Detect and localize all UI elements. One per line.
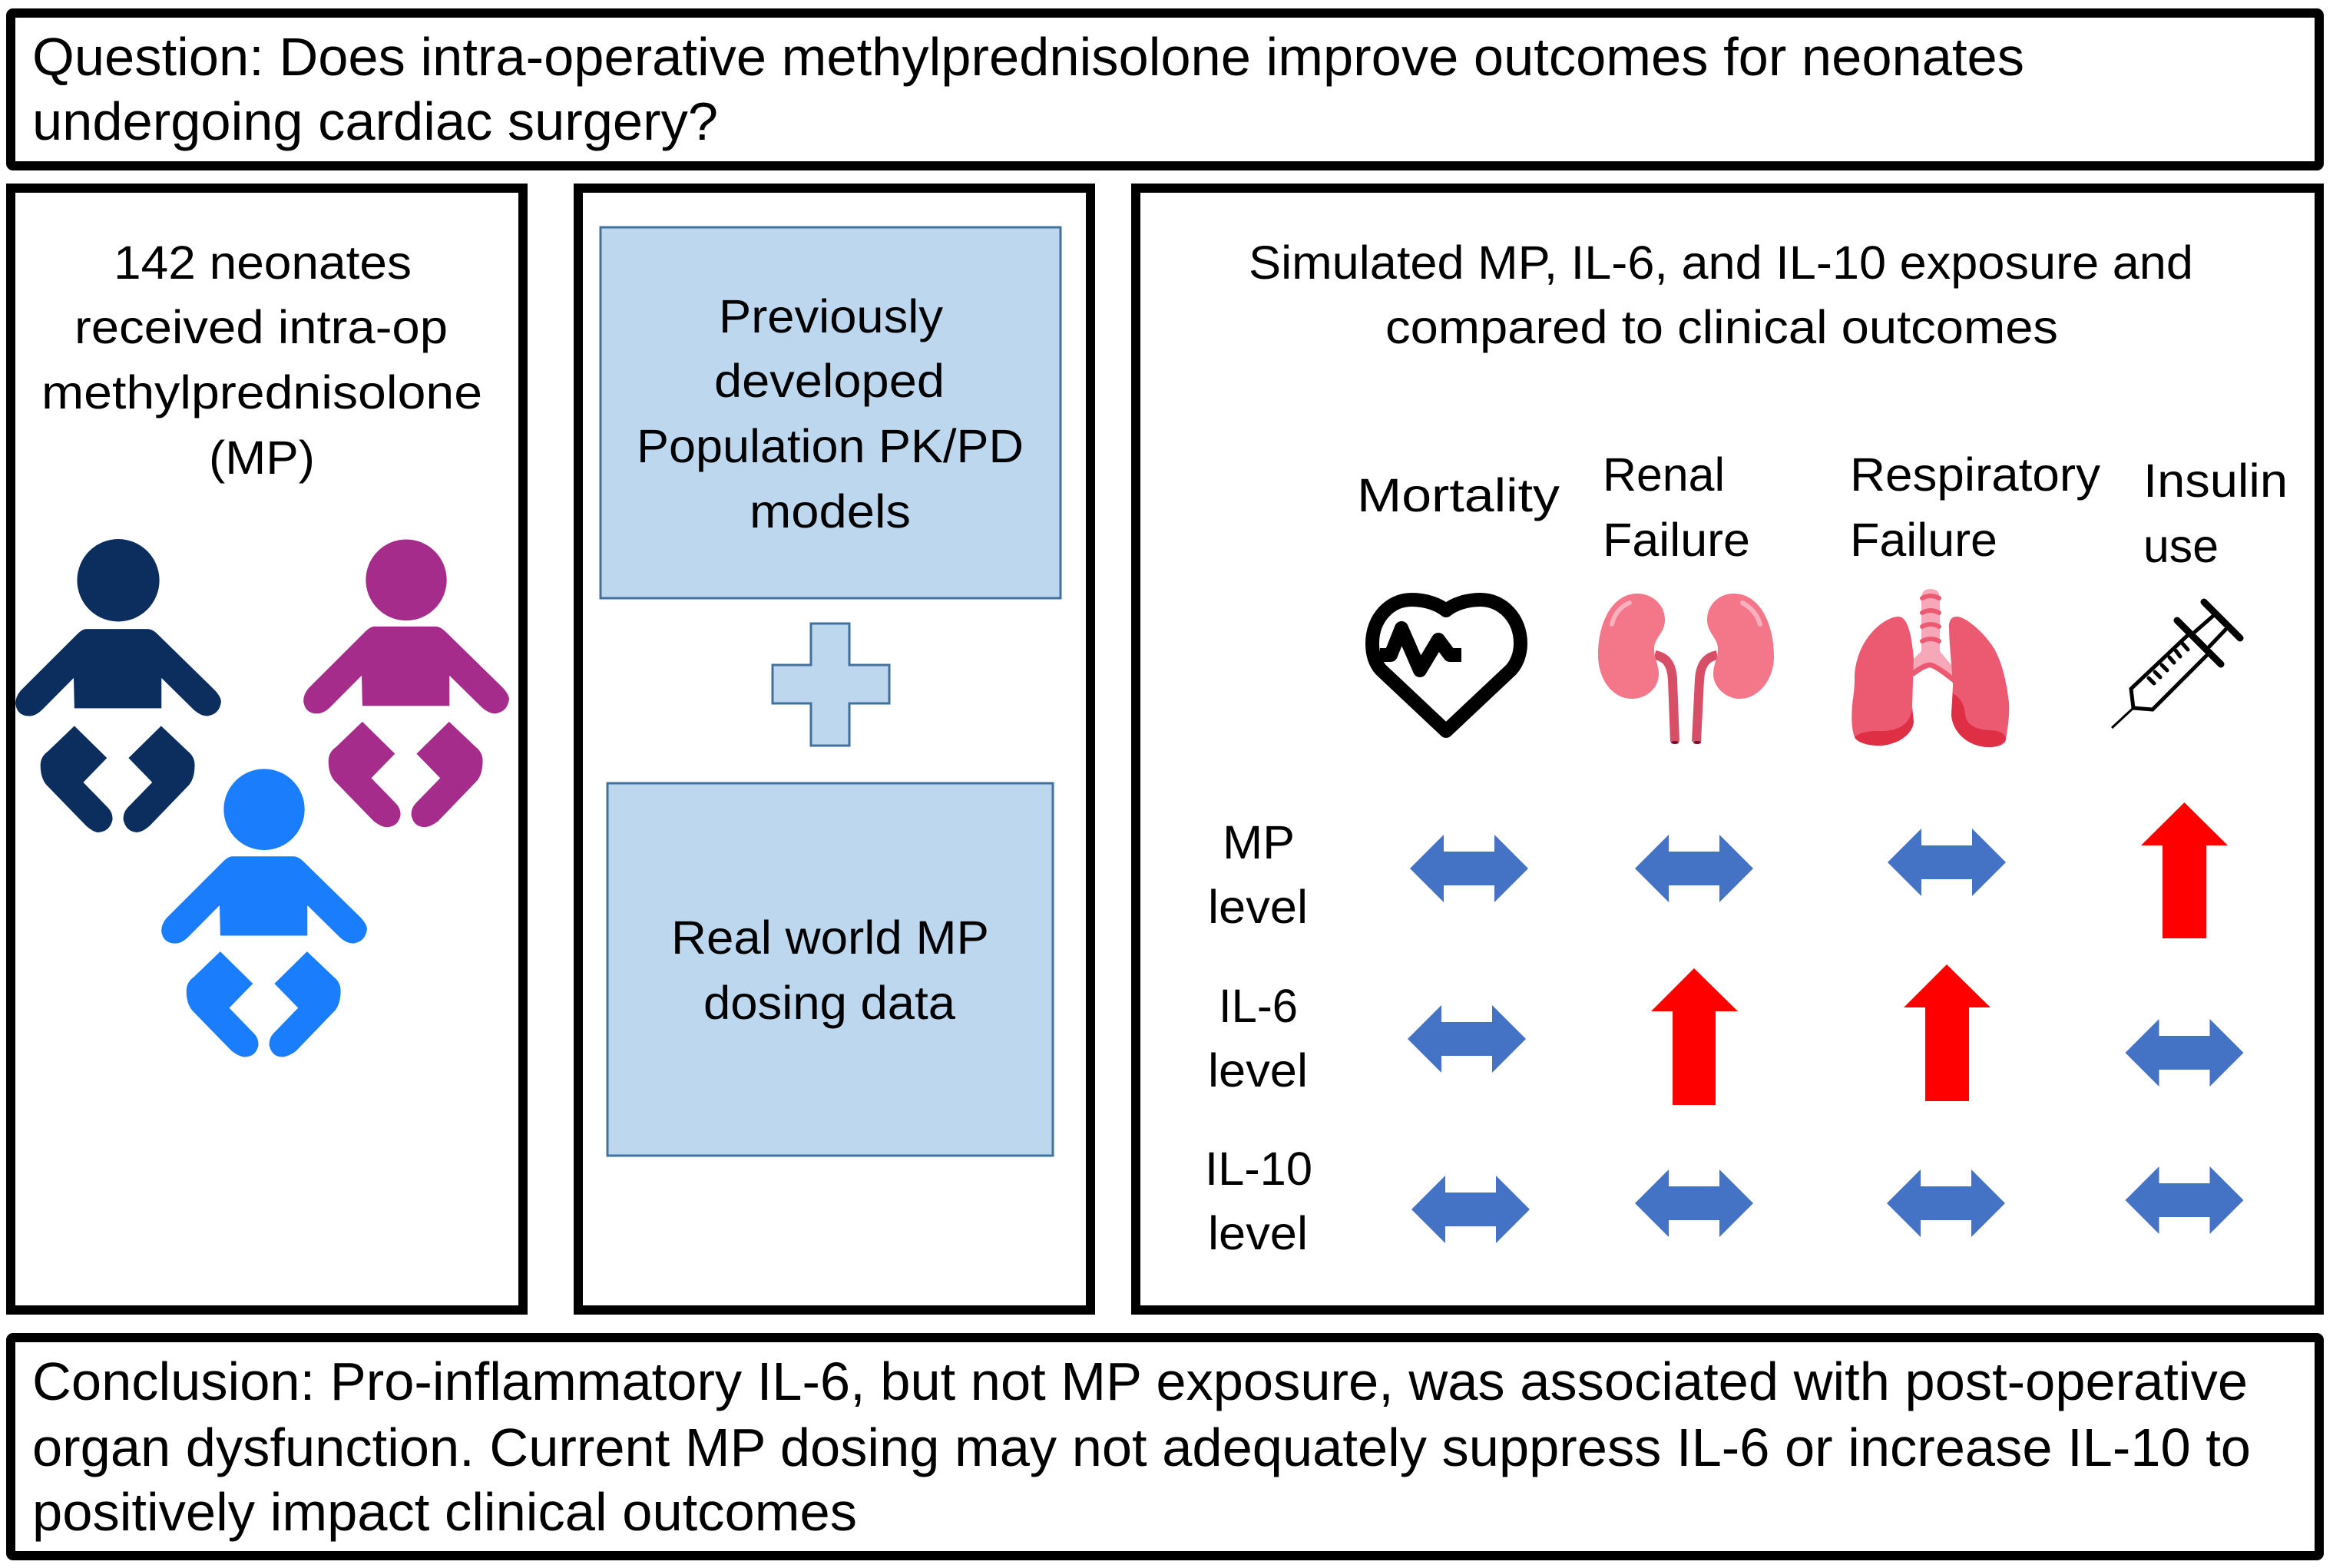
column label: insulin use: Insulin bbox=[2143, 455, 2288, 507]
row label: IL-6 level bbox=[1208, 980, 1308, 1097]
row label: IL-6 level: level bbox=[1208, 1044, 1308, 1097]
panel heading: Simulated MP, IL-6, and IL-10 exposure and bbox=[1249, 237, 2193, 289]
row label: MP level bbox=[1208, 816, 1308, 933]
arrow: MP vs insulin use, increased bbox=[2141, 802, 2228, 938]
box: population PK/PD models: developed bbox=[714, 355, 945, 407]
population text: received intra-op bbox=[74, 301, 448, 353]
arrow: MP vs respiratory failure, no association bbox=[1888, 829, 2006, 896]
box: population PK/PD models: models bbox=[750, 485, 911, 538]
population text bbox=[41, 237, 482, 484]
column label: respiratory failure bbox=[1850, 448, 2101, 566]
icon: heart with ECG bbox=[1372, 600, 1521, 731]
arrow: IL-10 vs mortality, no association bbox=[1411, 1176, 1530, 1243]
box: real world dosing data: dosing data bbox=[703, 977, 955, 1029]
icon: blue baby bbox=[161, 769, 367, 1057]
row label: MP level: MP bbox=[1223, 816, 1295, 868]
conclusion text: Conclusion: Pro-inflammatory IL-6, but not MP exposure, was associated with post-operative bbox=[32, 1351, 2248, 1411]
row label: IL-10 level bbox=[1205, 1143, 1312, 1259]
box: real world dosing data: Real world MP bbox=[671, 911, 989, 964]
icon: purple baby bbox=[303, 539, 509, 827]
column label: renal failure bbox=[1603, 448, 1750, 566]
column label: respiratory failure: Failure bbox=[1850, 514, 1997, 566]
row label: IL-10 level: IL-10 bbox=[1205, 1143, 1312, 1195]
population text: methylprednisolone bbox=[41, 366, 482, 418]
icon: syringe bbox=[2112, 602, 2240, 728]
column label: renal failure: Renal bbox=[1603, 448, 1725, 501]
box: population PK/PD models: Population PK/PD bbox=[637, 420, 1024, 472]
icon: navy baby bbox=[15, 539, 221, 832]
arrow: IL-10 vs respiratory failure, no association bbox=[1887, 1169, 2005, 1237]
arrow: IL-6 vs mortality, no association bbox=[1408, 1005, 1526, 1073]
icon: lungs bbox=[1852, 589, 2009, 747]
panel: study population bbox=[11, 188, 523, 1310]
arrow: IL-6 vs renal failure, increased bbox=[1651, 968, 1738, 1105]
question text: Question: Does intra-operative methylprednisolone improve outcomes for neonates bbox=[32, 27, 2024, 87]
question text bbox=[32, 27, 2024, 151]
population text: (MP) bbox=[209, 432, 315, 484]
box: population PK/PD models bbox=[601, 227, 1061, 598]
icon: kidneys bbox=[1598, 594, 1774, 744]
column label: renal failure: Failure bbox=[1603, 514, 1750, 566]
panel: question bbox=[11, 13, 2319, 166]
conclusion text bbox=[32, 1351, 2251, 1542]
column label: insulin use: use bbox=[2143, 520, 2219, 572]
column label: respiratory failure: Respiratory bbox=[1850, 448, 2101, 501]
panel: data sources bbox=[578, 188, 1090, 1310]
icon: plus sign bbox=[773, 624, 889, 746]
conclusion text: positively impact clinical outcomes bbox=[32, 1482, 857, 1542]
row label: MP level: level bbox=[1208, 881, 1308, 933]
panel heading bbox=[1249, 237, 2193, 353]
conclusion text: organ dysfunction. Current MP dosing may not adequately suppress IL-6 or increase IL-10 to bbox=[32, 1417, 2251, 1477]
arrow: IL-10 vs renal failure, no association bbox=[1635, 1169, 1753, 1237]
column label: insulin use bbox=[2143, 455, 2288, 572]
row label: IL-10 level: level bbox=[1208, 1207, 1308, 1259]
panel heading: compared to clinical outcomes bbox=[1385, 301, 2058, 353]
panel: conclusion bbox=[11, 1338, 2319, 1556]
row label: IL-6 level: IL-6 bbox=[1219, 980, 1298, 1032]
arrow: IL-6 vs insulin use, no association bbox=[2126, 1019, 2244, 1087]
question text: undergoing cardiac surgery? bbox=[32, 91, 718, 151]
arrow: IL-6 vs respiratory failure, increased bbox=[1904, 964, 1990, 1101]
box: population PK/PD models: Previously bbox=[719, 290, 944, 342]
box: real world dosing data bbox=[607, 783, 1053, 1156]
population text: 142 neonates bbox=[114, 237, 412, 289]
column label: mortality: Mortality bbox=[1357, 469, 1560, 521]
arrow: MP vs renal failure, no association bbox=[1635, 835, 1753, 902]
arrow: IL-10 vs insulin use, no association bbox=[2126, 1166, 2244, 1234]
arrow: MP vs mortality, no association bbox=[1410, 835, 1528, 902]
panel: simulated exposure and outcomes bbox=[1136, 188, 2319, 1310]
